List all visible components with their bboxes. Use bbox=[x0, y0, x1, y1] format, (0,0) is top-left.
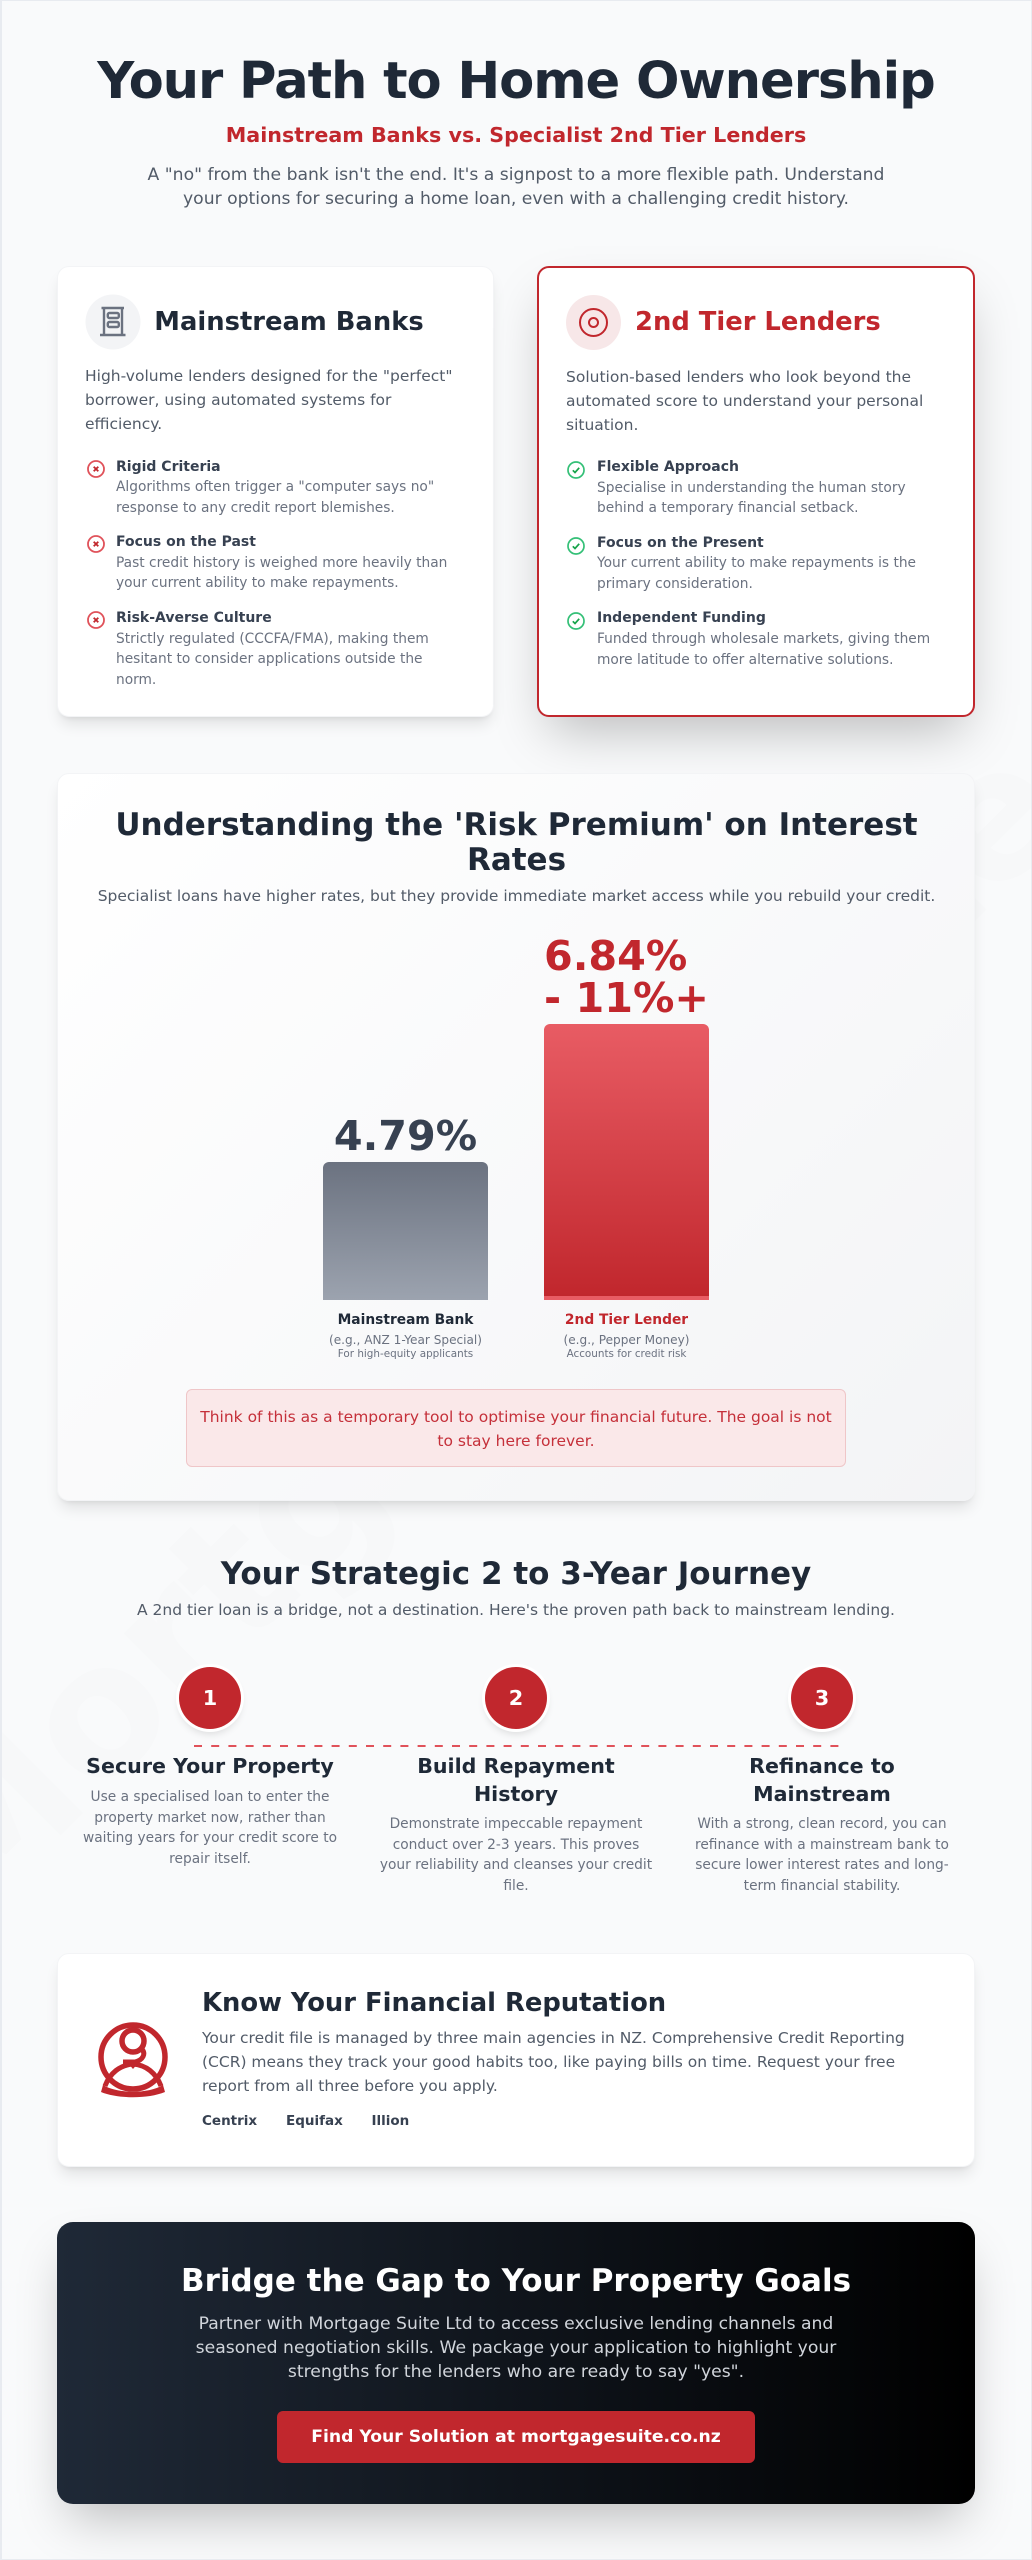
step number 1 bbox=[179, 1666, 241, 1728]
reputation text: (CCR) means they track your good habits too, like paying bills on time. Request your free bbox=[202, 2053, 895, 2071]
icon: cross bbox=[87, 611, 105, 629]
item: risk-averse culture: Strictly regulated (CCCFA/FMA), making them bbox=[116, 631, 429, 647]
step number 1: 1 bbox=[203, 1686, 217, 1710]
reputation text: Your credit file is managed by three main agencies in NZ. Comprehensive Credit Reporting bbox=[202, 2029, 905, 2047]
step text bbox=[380, 1816, 652, 1894]
step title: Secure Your Property bbox=[86, 1754, 334, 1778]
cta heading: Bridge the Gap to Your Property Goals bbox=[181, 2263, 851, 2299]
step text: refinance with a mainstream bank to bbox=[695, 1837, 949, 1853]
panel: financial reputation bbox=[57, 1953, 975, 2167]
agencies bbox=[202, 2113, 409, 2129]
step number 2: 2 bbox=[509, 1686, 523, 1710]
description bbox=[566, 368, 923, 434]
step text bbox=[695, 1816, 949, 1894]
step text: your reliability and cleanses your credit bbox=[380, 1857, 652, 1873]
item: risk-averse culture bbox=[116, 610, 429, 688]
item: flexible approach bbox=[597, 459, 906, 516]
step title: Refinance to bbox=[749, 1754, 895, 1778]
journey subtext: A 2nd tier loan is a bridge, not a destination. Here's the proven path back to mainstream lending. bbox=[137, 1601, 895, 1619]
icon: cross bbox=[87, 460, 105, 478]
label: anz example: (e.g., ANZ 1-Year Special) bbox=[329, 1333, 482, 1347]
step title bbox=[749, 1754, 895, 1806]
item: independent funding: more latitude to offer alternative solutions. bbox=[597, 652, 893, 668]
item: risk-averse culture: Risk-Averse Culture bbox=[116, 610, 272, 626]
reputation text bbox=[202, 2029, 905, 2095]
item: independent funding: Independent Funding bbox=[597, 610, 766, 626]
callout: Think of this as a temporary tool to optimise your financial future. The goal is not bbox=[200, 1408, 832, 1426]
cta text: strengths for the lenders who are ready to say "yes". bbox=[288, 2362, 744, 2382]
step text bbox=[83, 1789, 337, 1867]
item: focus on the present: Your current ability to make repayments is the bbox=[597, 555, 916, 571]
heading: risk premium: Understanding the 'Risk Premium' on Interest bbox=[115, 807, 918, 843]
step number 3: 3 bbox=[815, 1686, 829, 1710]
description: Solution-based lenders who look beyond the bbox=[566, 368, 911, 386]
value: 2nd tier rate: 6.84% bbox=[544, 932, 687, 980]
step title: Mainstream bbox=[753, 1782, 891, 1806]
step number 3 bbox=[791, 1666, 853, 1728]
item: risk-averse culture: norm. bbox=[116, 672, 156, 688]
cta button: Find Your Solution at mortgagesuite.co.nz bbox=[311, 2427, 721, 2447]
intro text bbox=[148, 165, 884, 209]
step number 2 bbox=[485, 1666, 547, 1728]
step 2 bbox=[380, 1667, 652, 1894]
heading: 2nd tier lenders: 2nd Tier Lenders bbox=[635, 307, 881, 337]
reputation text: report from all three before you apply. bbox=[202, 2077, 498, 2095]
intro text: your options for securing a home loan, even with a challenging credit history. bbox=[183, 189, 849, 209]
description: automated score to understand your personal bbox=[566, 392, 923, 410]
value: 2nd tier rate: - 11%+ bbox=[544, 974, 709, 1022]
item: focus on the past: your current ability to make repayments. bbox=[116, 575, 399, 591]
step text: conduct over 2-3 years. This proves bbox=[393, 1837, 639, 1853]
icon: bank building bbox=[86, 294, 140, 350]
bar chart bbox=[323, 932, 709, 1360]
dashed connector bbox=[194, 1745, 838, 1747]
cta text bbox=[196, 2314, 836, 2382]
item: focus on the past bbox=[116, 534, 447, 591]
icon: check bbox=[567, 461, 585, 479]
label: credit risk: Accounts for credit risk bbox=[567, 1348, 686, 1360]
agency: illion: Illion bbox=[372, 2113, 409, 2129]
item: risk-averse culture: hesitant to consider applications outside the bbox=[116, 651, 423, 667]
step title: Build Repayment bbox=[417, 1754, 615, 1778]
item: flexible approach: Flexible Approach bbox=[597, 459, 739, 475]
description bbox=[85, 367, 452, 433]
bar: mainstream bbox=[323, 1162, 488, 1300]
icon: check bbox=[567, 612, 585, 630]
item: flexible approach: Specialise in understanding the human story bbox=[597, 480, 906, 496]
panel: risk premium chart bbox=[57, 773, 975, 1501]
panel: mainstream banks bbox=[57, 266, 494, 717]
heading: risk premium bbox=[115, 807, 918, 878]
cta text: Partner with Mortgage Suite Ltd to access exclusive lending channels and bbox=[199, 2314, 833, 2334]
step text: Use a specialised loan to enter the bbox=[91, 1789, 329, 1805]
item: focus on the past: Past credit history is weighed more heavily than bbox=[116, 555, 447, 571]
item: rigid criteria: response to any credit report blemishes. bbox=[116, 500, 395, 516]
title: Your Path to Home Ownership bbox=[97, 51, 935, 111]
agency: equifax: Equifax bbox=[286, 2113, 343, 2129]
step text: property market now, rather than bbox=[94, 1810, 326, 1826]
label: mainstream bank: Mainstream Bank bbox=[338, 1312, 473, 1328]
description: High-volume lenders designed for the "perfect" bbox=[85, 367, 452, 385]
callout: to stay here forever. bbox=[437, 1432, 595, 1450]
chart subtext: Specialist loans have higher rates, but they provide immediate market access while you rebuild your credit. bbox=[98, 887, 935, 905]
step text: secure lower interest rates and long- bbox=[695, 1857, 949, 1873]
step text: file. bbox=[503, 1878, 529, 1894]
icon: target bbox=[566, 295, 621, 350]
subtitle: Mainstream Banks vs. Specialist 2nd Tier Lenders bbox=[226, 123, 806, 147]
item: focus on the past: Focus on the Past bbox=[116, 534, 256, 550]
icon: cross bbox=[87, 535, 105, 553]
agency: centrix: Centrix bbox=[202, 2113, 257, 2129]
step 3 bbox=[695, 1667, 949, 1894]
callout bbox=[186, 1389, 846, 1467]
item: independent funding: Funded through wholesale markets, giving them bbox=[597, 631, 930, 647]
description: situation. bbox=[566, 416, 638, 434]
item: rigid criteria bbox=[116, 458, 434, 516]
item: independent funding bbox=[597, 610, 930, 668]
label: 2nd tier lender: 2nd Tier Lender bbox=[565, 1312, 688, 1328]
cta text: seasoned negotiation skills. We package your application to highlight your bbox=[196, 2338, 836, 2358]
panel: call to action bbox=[57, 2222, 975, 2504]
item: focus on the present: primary consideration. bbox=[597, 576, 753, 592]
description: efficiency. bbox=[85, 415, 162, 433]
item: focus on the present bbox=[597, 535, 916, 592]
step 1 bbox=[83, 1667, 337, 1867]
intro text: A "no" from the bank isn't the end. It's a signpost to a more flexible path. Understand bbox=[148, 165, 884, 185]
cta button bbox=[277, 2411, 755, 2463]
heading: mainstream banks: Mainstream Banks bbox=[154, 307, 424, 337]
label: pepper example: (e.g., Pepper Money) bbox=[564, 1333, 689, 1347]
icon: check bbox=[567, 537, 585, 555]
bar: 2nd tier bbox=[544, 1024, 709, 1300]
icon: person logo bbox=[98, 2022, 168, 2098]
step title: History bbox=[474, 1782, 558, 1806]
item: rigid criteria: Rigid Criteria bbox=[116, 458, 221, 474]
step text: repair itself. bbox=[169, 1851, 251, 1867]
item: focus on the present: Focus on the Present bbox=[597, 535, 764, 551]
description: borrower, using automated systems for bbox=[85, 391, 391, 409]
step text: waiting years for your credit score to bbox=[83, 1830, 337, 1846]
step title bbox=[417, 1754, 615, 1806]
value: 2nd tier rate bbox=[544, 932, 709, 1022]
heading: risk premium: Rates bbox=[467, 842, 566, 878]
item: flexible approach: behind a temporary financial setback. bbox=[597, 500, 859, 516]
heading: know your reputation: Know Your Financial Reputation bbox=[202, 1988, 666, 2018]
step text: With a strong, clean record, you can bbox=[697, 1816, 947, 1832]
item: rigid criteria: Algorithms often trigger a "computer says no" bbox=[116, 479, 434, 495]
heading: journey: Your Strategic 2 to 3-Year Journey bbox=[221, 1556, 811, 1592]
value: mainstream rate: 4.79% bbox=[334, 1112, 477, 1160]
step text: Demonstrate impeccable repayment bbox=[390, 1816, 642, 1832]
label: high-equity: For high-equity applicants bbox=[338, 1348, 473, 1360]
step text: term financial stability. bbox=[744, 1878, 900, 1894]
panel: 2nd tier lenders bbox=[537, 266, 975, 717]
